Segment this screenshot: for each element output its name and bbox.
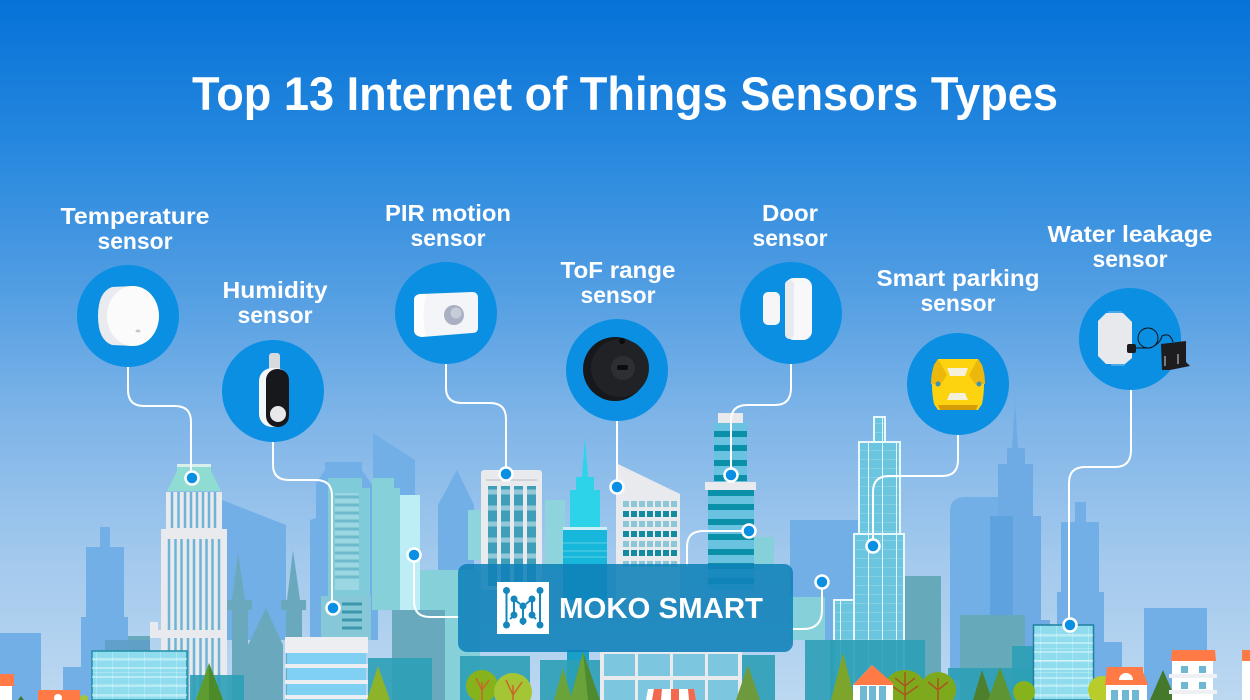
mid-ground teal buildings [128,478,1025,700]
icon: water leakage sensor [1098,311,1190,370]
MOKO SMART brand panel [458,564,793,652]
parking label [876,265,1040,316]
building: white banded block [285,637,368,700]
sensor: ToF range [560,257,676,421]
sensor: door [740,200,842,364]
building: temperature tower [150,464,227,700]
building: right glass block [1034,625,1094,700]
temperature label: Temperature [60,203,210,229]
sensor: temperature [60,203,210,367]
temperature label: sensor [98,228,173,254]
door label: sensor [752,225,828,251]
icon: ToF sensor [583,337,649,401]
trees and houses [0,650,1250,700]
icon: temperature sensor [98,286,159,346]
foreground teal blocks [105,640,1033,700]
title: Top 13 Internet of Things Sensors Types [192,67,1058,120]
humidity label: Humidity [222,277,328,303]
ToF label [560,257,676,308]
door label [752,200,828,251]
parking label: sensor [920,290,996,316]
building: ToF tower [616,463,680,600]
sensor: water leakage [1048,221,1212,390]
icon: PIR sensor [414,292,478,337]
temperature label [60,203,210,254]
ToF label: sensor [580,282,656,308]
building: cyan spire tower [563,437,607,700]
water leakage label [1048,221,1212,272]
humidity label [222,277,328,328]
PIR label: PIR motion [385,200,511,226]
door label: Door [762,200,818,226]
connector lines [128,364,1131,629]
church silhouette [225,550,306,700]
sensor: humidity [222,277,328,442]
building: door tower [705,413,756,590]
sensor: PIR motion [385,200,511,364]
sensor: smart parking [876,265,1040,435]
storefront [600,652,742,700]
water leakage label: sensor [1092,246,1168,272]
icon: humidity sensor [259,353,289,427]
logo mark [497,582,549,634]
building: parking tower [834,417,904,700]
ToF label: ToF range [560,257,676,283]
building: left glass block [92,651,187,700]
humidity label: sensor [238,302,313,328]
connector dots [186,468,1076,632]
distant skyline [0,400,1207,700]
building: PIR tower [481,470,542,590]
PIR label [385,200,511,251]
icon: parking sensor [931,359,985,410]
PIR label: sensor [410,225,486,251]
icon: door sensor [763,278,812,340]
water leakage label: Water leakage [1048,221,1212,247]
parking label: Smart parking [876,265,1040,291]
brand name: MOKO SMART [559,593,763,625]
